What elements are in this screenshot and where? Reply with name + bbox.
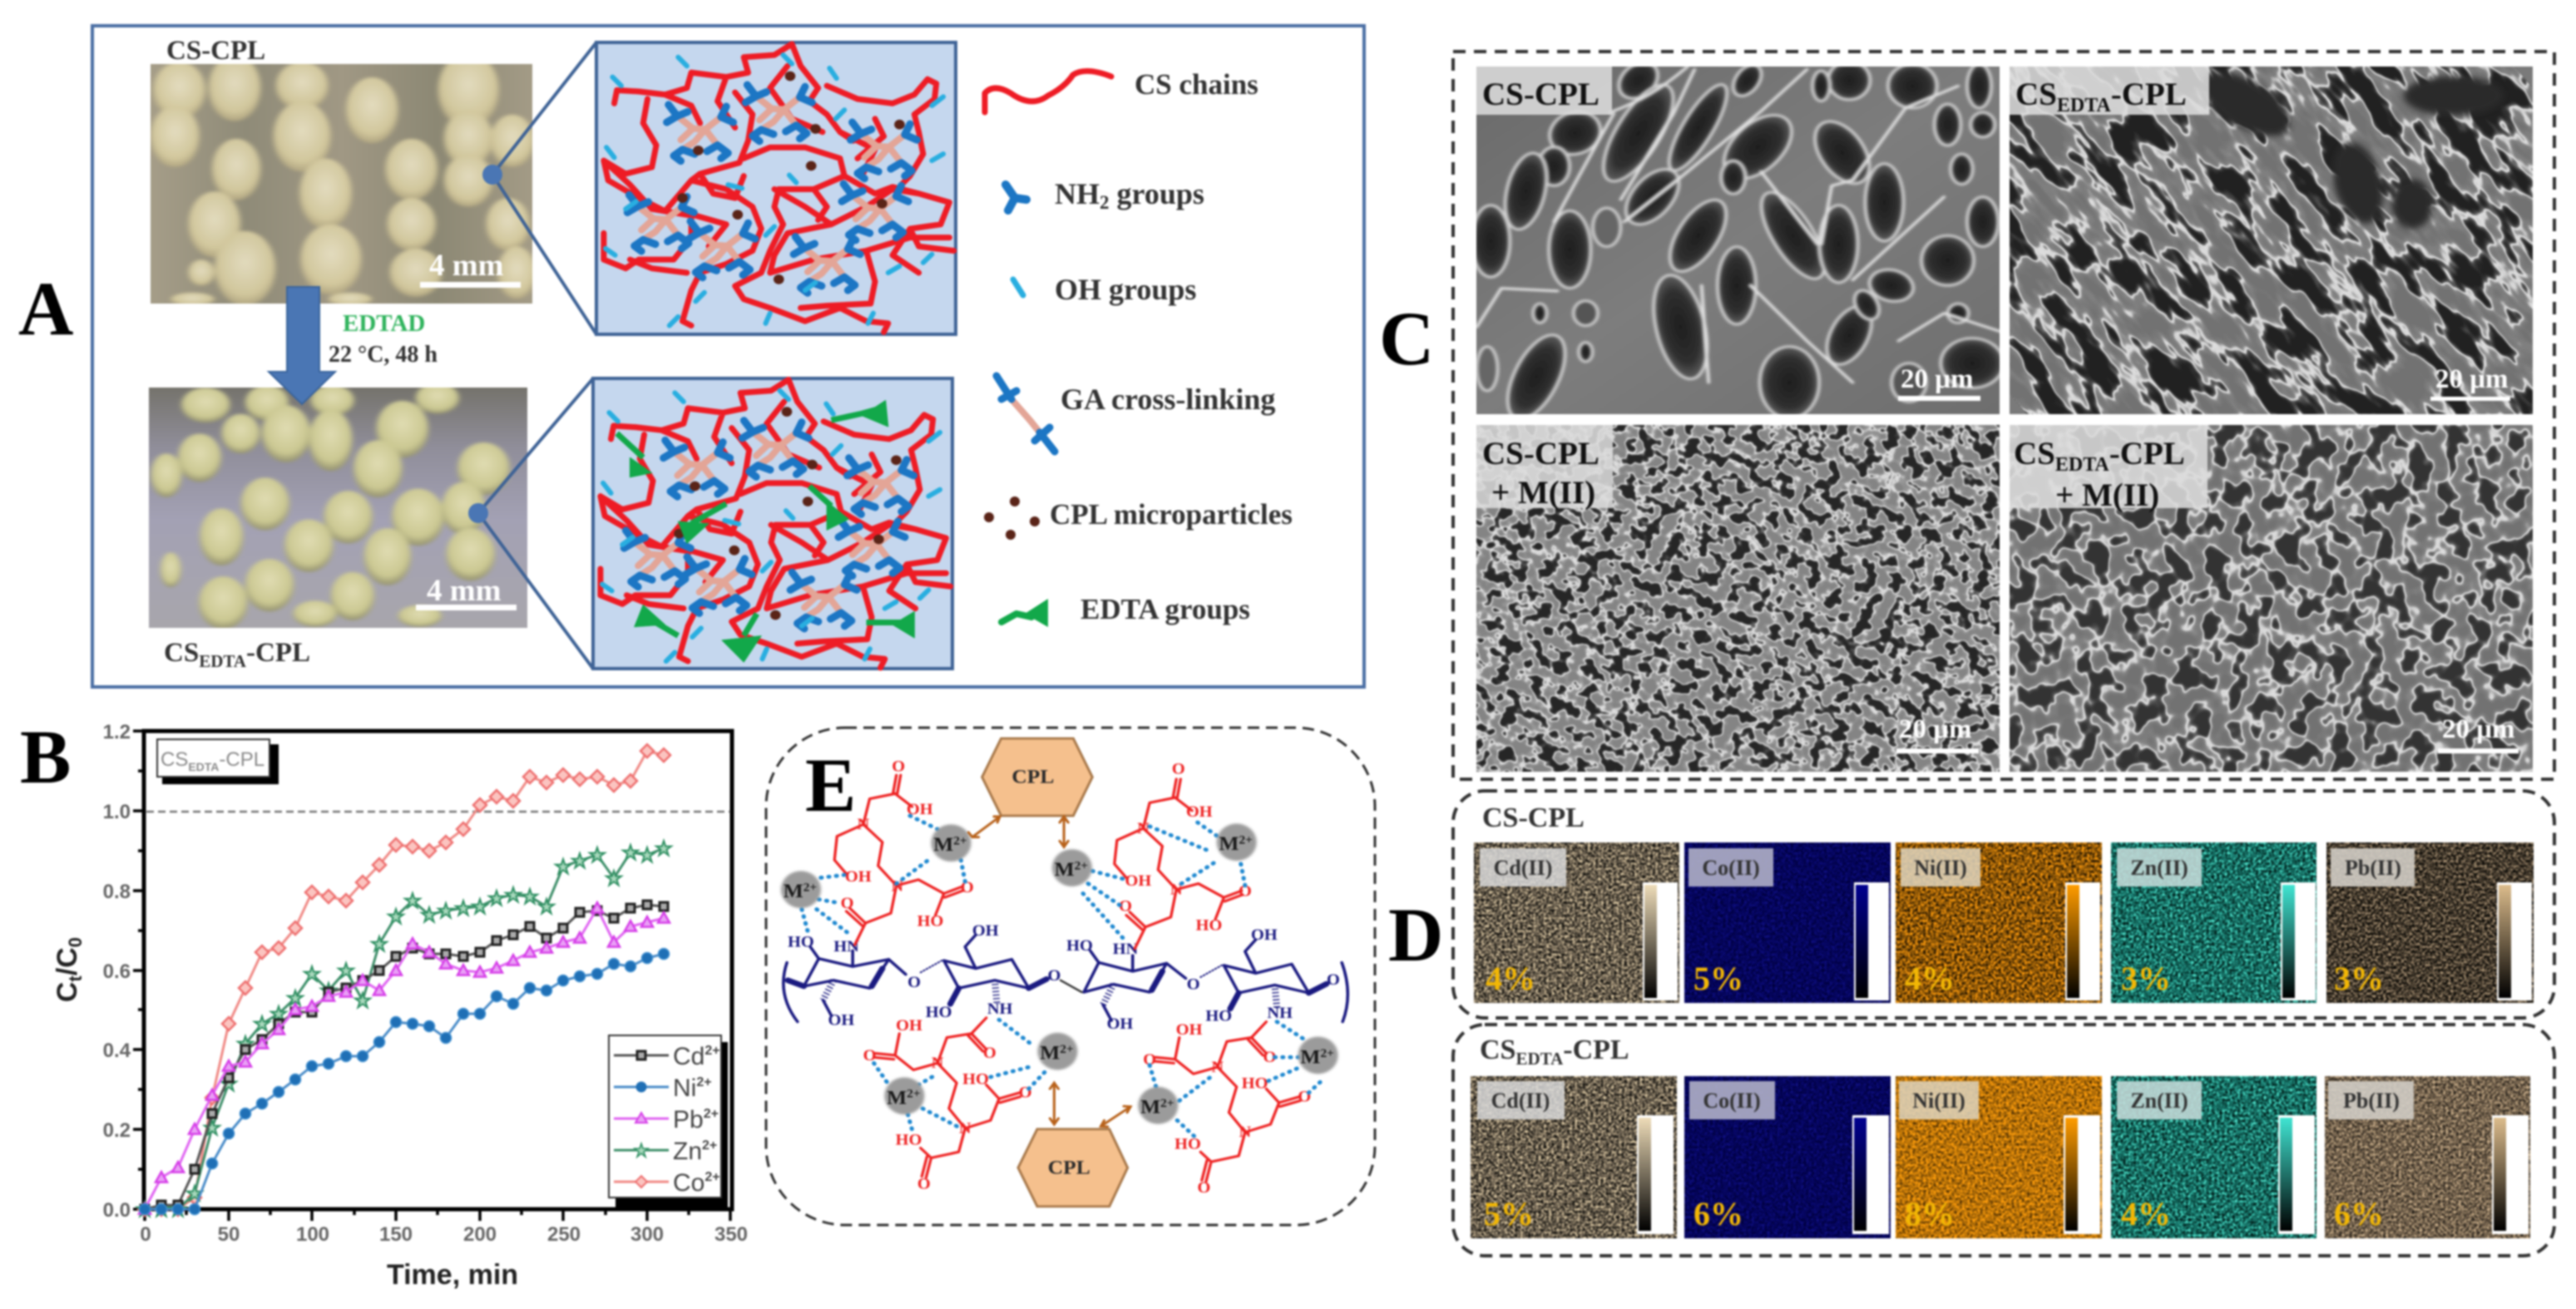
map: Co(II) 6%: Co(II) xyxy=(1703,1089,1761,1113)
backbone atom labels xyxy=(788,922,1340,1033)
SEM tile: CSEDTA-CPL + M(II): 20 μm xyxy=(2442,714,2514,744)
label CSEDTA-CPL: EDTA xyxy=(199,651,247,671)
panel C: SEM micrographs xyxy=(1262,0,2576,1032)
map: Cd(II) 5%: Cd(II) xyxy=(1491,1089,1550,1113)
label CSEDTA-CPL: -CPL xyxy=(246,638,310,668)
x-axis tick labels: 100 xyxy=(296,1223,329,1246)
reaction condition EDTAD: EDTAD xyxy=(343,310,425,337)
legend: CS chains: CS chains xyxy=(1135,68,1258,101)
backbone atom labels: O xyxy=(1187,976,1200,993)
metal ions: M xyxy=(933,834,953,856)
panel letter E: E xyxy=(805,743,856,827)
zoom lines top xyxy=(482,42,596,334)
EDTA atom labels: HO xyxy=(1196,916,1222,934)
map: Co(II) 5%: Co(II) xyxy=(1702,856,1760,880)
panel A: bead preparation schematic xyxy=(18,26,1364,687)
backbone atom labels: HO xyxy=(926,1004,952,1021)
panel letter C: C xyxy=(1379,296,1434,381)
backbone atom labels: O xyxy=(1047,966,1061,985)
EDTA atom labels: OH xyxy=(1176,1020,1202,1039)
legend: CPL microparticles: CPL microparticles xyxy=(1050,498,1293,531)
EDTA atom labels: HO xyxy=(896,1131,922,1148)
row frame: CS-CPL xyxy=(1453,791,2554,1018)
metal ions: M xyxy=(1300,1046,1320,1068)
legend: OH groups: OH groups xyxy=(1055,273,1196,306)
chart legend: Cd xyxy=(673,1043,705,1070)
EDTA atom labels: OH xyxy=(896,1017,922,1035)
row frame: CSEDTA-CPL xyxy=(1453,1025,2554,1256)
EDTA atom labels: N xyxy=(959,1119,972,1137)
EDTA atom labels: N xyxy=(1137,819,1150,837)
backbone atom labels: O xyxy=(907,973,921,991)
map: Pb(II) 3%: Pb(II) xyxy=(2345,856,2401,880)
y-axis tick labels: 0.8 xyxy=(103,881,131,903)
CPL particle top: CPL xyxy=(1011,766,1054,788)
SEM tile: CS-CPL + M(II) xyxy=(1262,165,2214,1032)
metal ions: 2+ xyxy=(907,1088,921,1101)
EDTA atom labels: HO xyxy=(917,912,943,931)
SEM tile: CSEDTA-CPL: -CPL xyxy=(2111,77,2187,112)
chart inset label CSEDTA-CPL: EDTA xyxy=(188,760,219,773)
series Ni2+ xyxy=(145,954,664,1209)
SEM tile: CSEDTA-CPL xyxy=(1794,0,2576,729)
SEM tile: CSEDTA-CPL: 20 μm xyxy=(2435,364,2508,394)
EDTA atom labels: O xyxy=(961,879,974,897)
zoom lines bottom xyxy=(468,378,593,669)
backbone atom labels: HO xyxy=(788,933,814,951)
legend: CS chains xyxy=(985,68,1258,112)
metal ions: 2+ xyxy=(1075,860,1088,872)
CPL particle top xyxy=(982,738,1092,816)
EDTA atom labels: O xyxy=(892,758,905,775)
map: Cd(II) 5%: 5% xyxy=(1484,1195,1534,1232)
chart legend: 2+ xyxy=(696,1075,712,1089)
molecular structure xyxy=(781,738,1347,1207)
EDTA atom labels: N xyxy=(891,877,903,895)
EDTA atom labels: HO xyxy=(1242,1074,1268,1092)
backbone atom labels: O xyxy=(1327,971,1340,989)
map: Ni(II) 4%: 4% xyxy=(1905,960,1955,997)
x-axis tick labels: 350 xyxy=(714,1223,748,1246)
EDTA atom labels: N xyxy=(932,1055,944,1072)
map: Co(II) 6% xyxy=(1684,1076,1891,1238)
legend: GA cross-linking: GA cross-linking xyxy=(1061,383,1275,416)
network schematic bottom with EDTA groups xyxy=(593,378,952,669)
map: Ni(II) 8% xyxy=(1896,1076,2102,1238)
photo: CSEDTA-CPL beads xyxy=(148,386,529,629)
EDTA atom labels: N xyxy=(1211,1058,1224,1076)
map: Cd(II) 5% xyxy=(1471,1076,1677,1238)
map: Pb(II) 6%: 6% xyxy=(2334,1195,2384,1232)
EDTA atom labels: O xyxy=(1239,882,1252,901)
map: Co(II) 5% xyxy=(1684,842,1891,1003)
metal ions: 2+ xyxy=(1160,1098,1174,1110)
y-axis tick labels xyxy=(103,721,131,1222)
backbone atom labels: OH xyxy=(972,922,999,940)
chart legend: 2+ xyxy=(705,1170,720,1184)
panel B: breakthrough line chart xyxy=(20,714,748,1291)
chart legend: Ni xyxy=(673,1074,696,1102)
backbone atom labels: NH xyxy=(1267,1004,1293,1022)
metal ions: M xyxy=(1040,1042,1060,1064)
EDTA atom labels: O xyxy=(983,1045,996,1062)
map: Ni(II) 8%: 8% xyxy=(1905,1195,1955,1232)
EDTA atom labels: O xyxy=(1119,897,1132,916)
row title CSEDTA-CPL: -CPL xyxy=(1563,1035,1629,1065)
EDTA atom labels: O xyxy=(1197,1179,1210,1197)
label CSEDTA-CPL: CS xyxy=(164,638,199,668)
EDTA arms in red xyxy=(834,775,1300,1182)
map: Zn(II) 4%: 4% xyxy=(2121,1195,2171,1232)
chart legend: 2+ xyxy=(704,1107,719,1121)
map: Ni(II) 4%: Ni(II) xyxy=(1914,856,1967,880)
legend: GA cross-linking xyxy=(996,376,1275,452)
series Cd2+ xyxy=(145,905,664,1209)
chart legend xyxy=(609,1035,728,1209)
panel D: EDS element maps xyxy=(1388,791,2554,1256)
photo: CS-CPL beads xyxy=(150,63,534,304)
EDTA atom labels: O xyxy=(863,1047,876,1064)
SEM tile: CSEDTA-CPL + M(II): CS xyxy=(2014,436,2055,472)
backbone atom labels: HN xyxy=(1113,941,1138,958)
SEM tile: CSEDTA-CPL + M(II) xyxy=(1821,210,2576,986)
row title CSEDTA-CPL: EDTA xyxy=(1515,1049,1564,1069)
map: Zn(II) 3% xyxy=(2111,842,2316,1003)
scale bar 4 mm bottom: 4 mm xyxy=(427,574,502,608)
chart inset label CSEDTA-CPL: CS xyxy=(161,748,188,771)
x-axis tick labels: 200 xyxy=(463,1223,497,1246)
EDTA atom labels: O xyxy=(1298,1088,1311,1105)
row title CSEDTA-CPL: CS xyxy=(1480,1035,1515,1065)
y-axis tick labels: 0.4 xyxy=(103,1040,131,1062)
coordination bonds xyxy=(802,816,1322,1139)
series Zn2+ xyxy=(145,848,664,1209)
map: Cd(II) 4% xyxy=(1474,842,1679,1003)
y-axis tick labels: 0.2 xyxy=(103,1119,131,1142)
map: Ni(II) 4% xyxy=(1896,842,2102,1003)
chart legend: 2+ xyxy=(702,1139,717,1153)
SEM tile: CS-CPL + M(II): CS-CPL xyxy=(1482,436,1599,472)
panel letter D: D xyxy=(1388,892,1443,977)
EDTA atom labels: OH xyxy=(845,868,872,886)
y-axis title: C xyxy=(52,982,83,1002)
legend: EDTA groups xyxy=(1001,593,1250,627)
SEM tile 1 scale bar: 20 μm xyxy=(1901,364,1973,394)
panel letter B: B xyxy=(20,714,71,799)
map: Pb(II) 3%: 3% xyxy=(2334,960,2384,997)
EDTA atom labels: N xyxy=(1170,881,1183,898)
x-axis tick labels: 250 xyxy=(547,1223,581,1246)
SEM tile 1 label xyxy=(1476,67,1612,115)
metal ions: 2+ xyxy=(803,882,817,894)
map: Pb(II) 6% xyxy=(2325,1076,2530,1238)
metal ions: M xyxy=(887,1087,907,1109)
EDTA atom labels: O xyxy=(1019,1084,1032,1102)
map: Zn(II) 3%: 3% xyxy=(2121,960,2171,997)
chitosan backbone xyxy=(784,935,1347,1022)
panel E: chelation mechanism schematic xyxy=(766,728,1375,1225)
SEM tile: CSEDTA-CPL + M(II): + M(II) xyxy=(2055,477,2159,513)
map: Pb(II) 3% xyxy=(2326,842,2534,1003)
y-axis title: t xyxy=(65,976,86,982)
EDTA atom labels: O xyxy=(1263,1049,1276,1066)
x-axis title: Time, min xyxy=(387,1259,518,1291)
EDTA atom labels: HO xyxy=(962,1070,989,1088)
panel E frame xyxy=(766,728,1375,1225)
metal ions: 2+ xyxy=(1320,1047,1334,1060)
backbone atom labels: HN xyxy=(833,938,859,956)
EDTA atom labels: OH xyxy=(907,801,933,818)
map: Zn(II) 3%: Zn(II) xyxy=(2130,856,2188,880)
metal ions xyxy=(781,823,1338,1124)
scale bar 4 mm top xyxy=(420,249,521,288)
backbone atom labels: NH xyxy=(987,1000,1012,1018)
series Co2+ xyxy=(145,751,664,1209)
SEM tile: CSEDTA-CPL: EDTA xyxy=(2057,95,2111,116)
backbone atom labels: HO xyxy=(1205,1007,1232,1025)
panel C frame xyxy=(1453,52,2554,779)
x-axis tick labels: 150 xyxy=(379,1223,413,1246)
EDTA atom labels: N xyxy=(1239,1124,1251,1141)
metal ions: 2+ xyxy=(1239,834,1253,847)
metal ions: 2+ xyxy=(1060,1044,1074,1056)
panel letter A: A xyxy=(18,266,73,351)
legend: NH2 groups: NH xyxy=(1055,177,1100,210)
EDTA atom labels: O xyxy=(1143,1050,1156,1069)
map: Cd(II) 4%: Cd(II) xyxy=(1494,856,1552,880)
SEM tile: CSEDTA-CPL: CS xyxy=(2015,77,2057,112)
CPL particle bottom: CPL xyxy=(1048,1157,1090,1178)
map: Zn(II) 4% xyxy=(2111,1076,2316,1238)
chart inset label CSEDTA-CPL: -CPL xyxy=(219,748,265,771)
metal ions: M xyxy=(1055,859,1075,881)
interaction arrows xyxy=(968,817,1130,1127)
backbone atom labels: HO xyxy=(1066,937,1093,955)
reference line at 1.0 xyxy=(146,811,730,813)
map: Cd(II) 4%: 4% xyxy=(1486,960,1535,997)
network schematic top xyxy=(596,42,956,334)
y-axis tick labels: 1.2 xyxy=(103,721,131,743)
chart legend: Co xyxy=(673,1169,705,1197)
SEM tile 1 label: CS-CPL xyxy=(1482,77,1599,112)
CPL particle bottom xyxy=(1018,1129,1128,1207)
legend: CPL microparticles xyxy=(984,496,1293,540)
map: Zn(II) 4%: Zn(II) xyxy=(2130,1089,2188,1113)
x-axis tick labels xyxy=(140,1223,748,1246)
SEM tile: CSEDTA-CPL + M(II): EDTA xyxy=(2055,454,2109,476)
map: Co(II) 5%: 5% xyxy=(1693,960,1743,997)
reaction condition temperature and time: 22 °C, 48 h xyxy=(329,342,438,368)
chart legend: Pb xyxy=(673,1106,704,1134)
EDTA atom labels: OH xyxy=(1125,872,1151,890)
EDTA atom labels: N xyxy=(858,816,869,833)
EDTA atom labels: O xyxy=(917,1175,931,1193)
EDTA atom labels: HO xyxy=(1174,1135,1201,1153)
y-axis title: 0 xyxy=(65,937,86,947)
row title CS-CPL: CS-CPL xyxy=(1482,803,1585,833)
SEM tile: CSEDTA-CPL + M(II): -CPL xyxy=(2109,436,2185,472)
plot frame and axis ticks xyxy=(133,731,732,1221)
y-axis tick labels: 0.6 xyxy=(103,961,131,983)
metal ions: 2+ xyxy=(953,835,967,847)
SEM tile: CS-CPL + M(II): + M(II) xyxy=(1491,475,1595,511)
map: Ni(II) 8%: Ni(II) xyxy=(1912,1089,1965,1113)
legend: NH2 groups: groups xyxy=(1110,177,1204,210)
EDTA atom labels: O xyxy=(841,895,853,912)
chart legend: 2+ xyxy=(705,1044,720,1058)
metal ions: M xyxy=(1140,1096,1160,1118)
EDTA atom labels: OH xyxy=(1186,803,1213,821)
scale bar 4 mm top: 4 mm xyxy=(429,249,504,283)
map: Pb(II) 6%: Pb(II) xyxy=(2343,1089,2400,1113)
backbone atom labels: OH xyxy=(1107,1015,1133,1033)
EDTA atom labels xyxy=(841,758,1311,1197)
backbone atom labels: OH xyxy=(1251,926,1278,944)
SEM tile: CS-CPL xyxy=(1471,57,2004,425)
SEM tile: CS-CPL + M(II): 20 μm xyxy=(1899,714,1971,744)
legend: NH2 groups: 2 xyxy=(1100,192,1110,213)
x-axis tick labels: 0 xyxy=(140,1223,151,1246)
backbone atom labels: OH xyxy=(828,1011,854,1029)
x-axis tick labels: 300 xyxy=(630,1223,664,1246)
y-axis title: /C xyxy=(52,947,83,976)
EDTA atom labels: O xyxy=(1172,760,1185,778)
y-axis tick labels: 1.0 xyxy=(103,801,131,823)
scale bar 4 mm bottom xyxy=(416,574,517,610)
arrow: EDTAD reaction xyxy=(269,287,335,404)
metal ions: M xyxy=(784,881,803,902)
label CS-CPL: CS-CPL xyxy=(166,36,265,66)
series Pb2+ xyxy=(145,908,664,1209)
x-axis tick labels: 50 xyxy=(218,1223,240,1246)
panel A frame xyxy=(92,26,1364,687)
metal ions: M xyxy=(1219,833,1239,855)
legend: EDTA groups: EDTA groups xyxy=(1080,593,1250,625)
y-axis tick labels: 0.0 xyxy=(103,1199,131,1222)
map: Co(II) 6%: 6% xyxy=(1693,1195,1743,1232)
chart inset label CSEDTA-CPL xyxy=(157,739,279,784)
chart legend: Zn xyxy=(673,1138,702,1165)
legend: NH2 groups xyxy=(1006,177,1204,213)
